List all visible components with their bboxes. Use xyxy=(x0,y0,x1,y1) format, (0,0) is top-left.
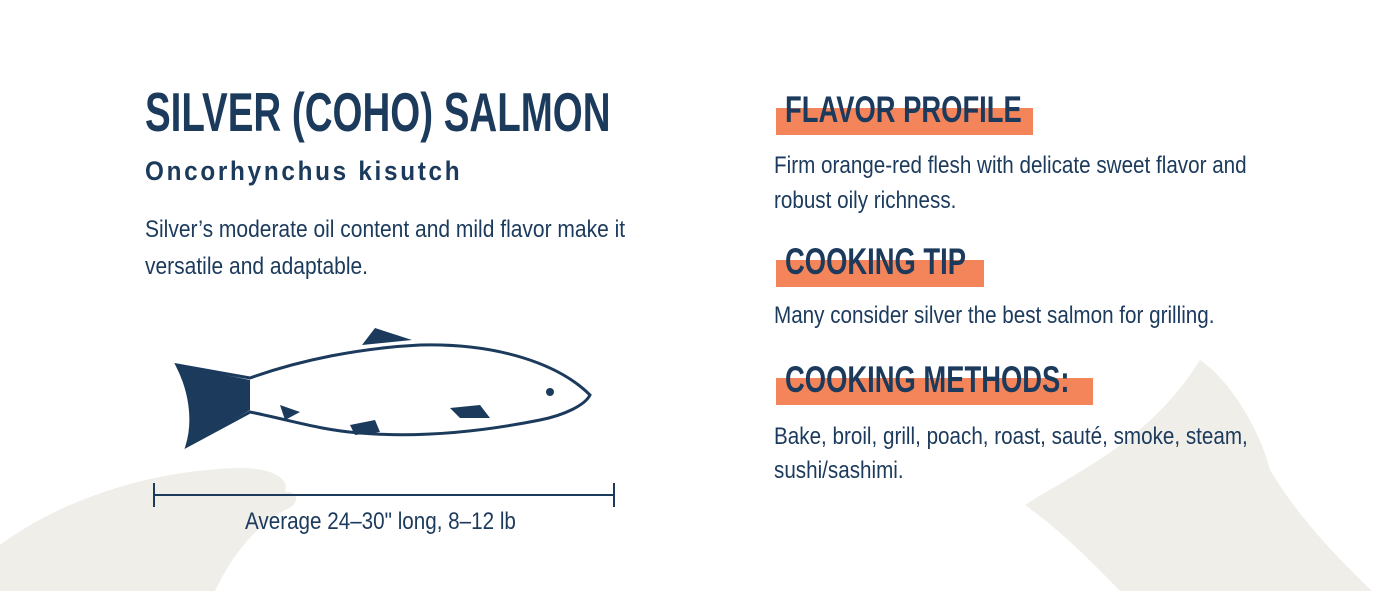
text: flavor profile xyxy=(774,152,1247,214)
text: cooking methods: sushi/sashimi. xyxy=(774,457,904,484)
subtitle: scientific name: Oncorhynchus kisutch xyxy=(145,156,462,186)
text: flavor profile: robust oily richness. xyxy=(774,187,956,214)
scale label: Average 24–30" long, 8–12 lb xyxy=(245,508,516,535)
icon: faded fish tail bottom right xyxy=(1025,360,1372,591)
text: cooking methods: Bake, broil, grill, poach, roast, sauté, smoke, steam, xyxy=(774,423,1248,450)
icon: faded fish head bottom left xyxy=(0,468,296,591)
heading: cooking methods: COOKING METHODS: xyxy=(785,359,1069,400)
description text: versatile and adaptable. xyxy=(145,253,368,280)
description text xyxy=(145,216,625,280)
text: cooking methods xyxy=(774,423,1248,484)
title: SILVER (COHO) SALMON xyxy=(145,81,611,143)
heading: cooking tip: COOKING TIP xyxy=(785,241,966,282)
icon: salmon illustration xyxy=(174,328,592,449)
heading: flavor profile: FLAVOR PROFILE xyxy=(785,89,1022,130)
scale bar xyxy=(153,483,615,507)
text: cooking tip: Many consider silver the best salmon for grilling. xyxy=(774,302,1215,329)
text: flavor profile: Firm orange-red flesh with delicate sweet flavor and xyxy=(774,152,1247,179)
description text: Silver’s moderate oil content and mild flavor make it xyxy=(145,216,625,243)
